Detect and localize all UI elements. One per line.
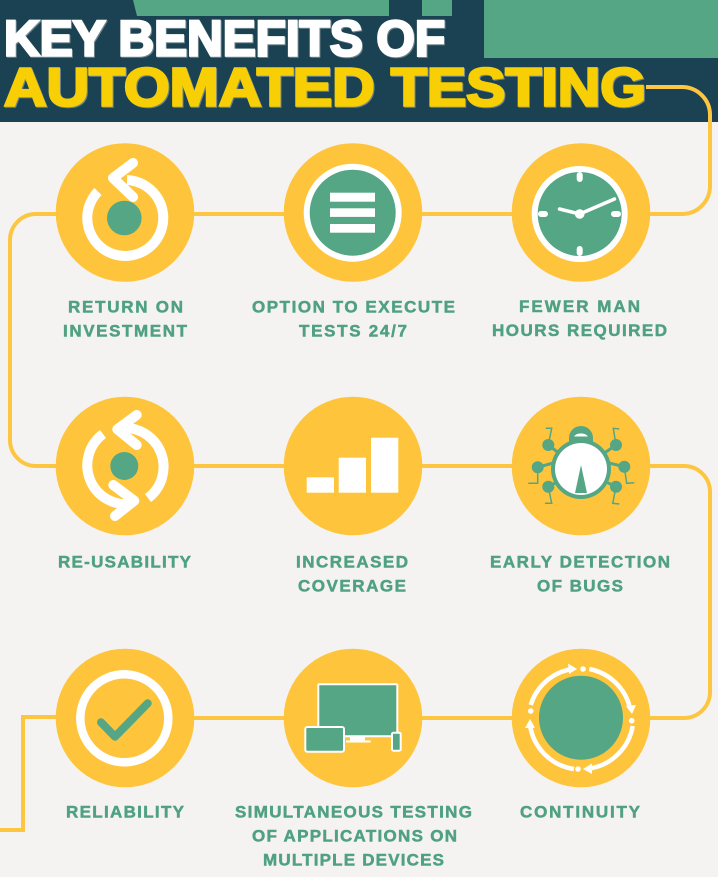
label: INVESTMENT (63, 322, 188, 340)
benefit: return on investment (56, 143, 194, 340)
icon: menu list (284, 143, 422, 282)
label: RETURN ON (68, 298, 183, 316)
label: INCREASED (296, 552, 408, 572)
icon: bug (512, 397, 650, 535)
benefit: fewer man hours required (492, 143, 667, 340)
label: TESTS 24/7 (299, 322, 407, 340)
icon: two circular arrows (56, 397, 194, 535)
label: MULTIPLE DEVICES (263, 850, 444, 870)
label: RELIABILITY (66, 802, 185, 822)
label: RE-USABILITY (58, 552, 192, 572)
icon: circular arrow (56, 143, 194, 282)
label: EARLY DETECTION (490, 552, 670, 572)
benefit: re-usability (56, 397, 194, 572)
icon: cycle around circle (512, 649, 650, 787)
label: CONTINUITY (520, 802, 641, 822)
benefit: continuity (512, 649, 650, 822)
title line 1: KEY BENEFITS OF (4, 10, 445, 66)
benefit: increased coverage (284, 397, 422, 596)
benefit: simultaneous testing on multiple devices (235, 649, 472, 870)
label: OF BUGS (537, 576, 623, 596)
benefit: early detection of bugs (490, 397, 670, 596)
label: HOURS REQUIRED (492, 321, 667, 340)
label: COVERAGE (298, 576, 406, 596)
title line 2: AUTOMATED TESTING (4, 58, 646, 118)
icon: bar chart (284, 397, 422, 535)
label: SIMULTANEOUS TESTING (235, 802, 472, 822)
label: OPTION TO EXECUTE (252, 298, 455, 316)
label: OF APPLICATIONS ON (252, 826, 457, 846)
icon: clock (512, 143, 650, 282)
icon: check mark (56, 649, 194, 787)
label: FEWER MAN (519, 297, 640, 316)
header banner (0, 0, 718, 122)
icon: devices (284, 649, 422, 787)
benefit: reliability (56, 649, 194, 822)
benefit: option to execute tests 24/7 (252, 143, 455, 340)
title (4, 10, 646, 118)
